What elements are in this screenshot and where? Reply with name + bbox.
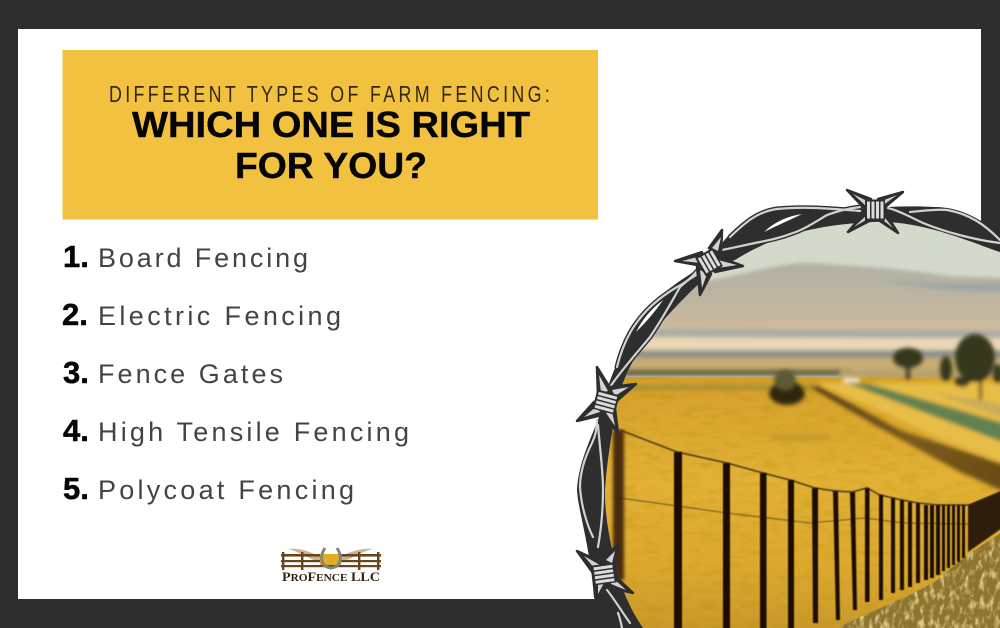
main heading: FOR YOU? [235, 145, 427, 186]
main heading [132, 104, 530, 186]
near posts [613, 430, 1000, 628]
logo horseshoe [322, 548, 340, 568]
wire gaps [764, 214, 802, 232]
car [843, 378, 859, 382]
barb 4 [577, 544, 633, 600]
trees [893, 334, 1000, 400]
ProFence logo [281, 548, 381, 584]
item 2: Electric Fencing [98, 301, 341, 331]
item 5: Polycoat Fencing [98, 475, 354, 505]
barbed wire wreath [577, 190, 1000, 628]
logo horns [288, 549, 373, 565]
item 1: 1. [63, 239, 89, 274]
blurred landscape [600, 263, 1000, 382]
item 1: Board Fencing [98, 243, 308, 273]
logo fence [281, 552, 381, 570]
item 4: High Tensile Fencing [98, 417, 409, 447]
logo gold plate [320, 554, 341, 565]
far fence line [810, 386, 1000, 492]
foreground grass [838, 534, 1000, 628]
main heading: WHICH ONE IS RIGHT [132, 104, 530, 145]
numbered list [62, 239, 409, 506]
subtitle: DIFFERENT TYPES OF FARM FENCING: [109, 82, 550, 108]
distant yellow verge [817, 383, 1000, 465]
wire strands [580, 207, 1000, 628]
item 3: 3. [63, 355, 89, 390]
farm photograph [590, 200, 1000, 628]
wire body [577, 206, 1000, 628]
item 4: 4. [63, 413, 89, 448]
logo wordmark: PROFENCE LLC [282, 570, 380, 584]
fence wires [620, 430, 1000, 524]
title banner [62, 50, 598, 220]
barb 1 [847, 190, 903, 233]
wire strand casing [610, 207, 860, 387]
item 5: 5. [63, 471, 89, 506]
barb 2 [675, 230, 743, 295]
road [847, 383, 1000, 445]
field [590, 377, 1000, 628]
item 2: 2. [62, 297, 88, 332]
bush [769, 381, 805, 405]
item 3: Fence Gates [98, 359, 283, 389]
barb 3 [577, 367, 636, 433]
sky [693, 222, 1000, 290]
